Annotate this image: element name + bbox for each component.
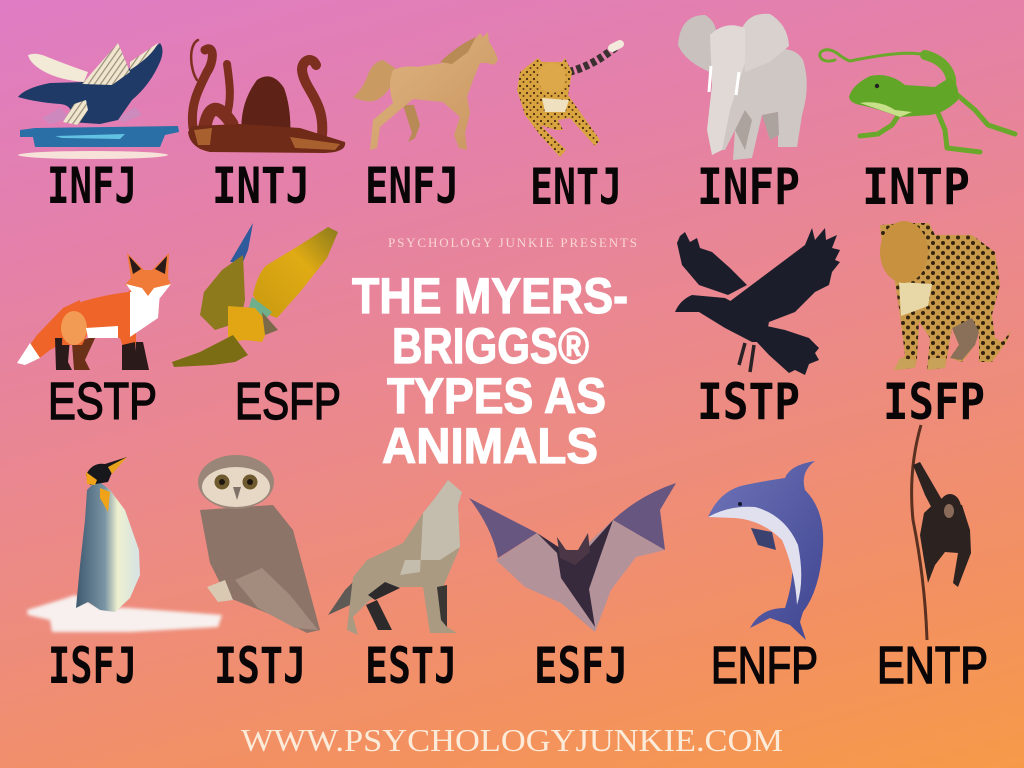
title: ANIMALS [382, 418, 598, 474]
animal: penguin on snow (ISFJ) [27, 457, 222, 632]
animal: leopard (ISFP) [880, 221, 1012, 370]
title [352, 268, 628, 474]
animal: octopus (INTJ) [188, 40, 345, 153]
animal: parrot (ESFP) [172, 223, 338, 367]
label: ISTJ [214, 637, 306, 695]
label: ENFP [711, 637, 818, 695]
animal: wolf (ESTJ) [328, 480, 462, 635]
animal: chimpanzee on vine (ENTP) [912, 425, 971, 640]
animal: crow (ISTP) [675, 228, 840, 375]
animal: lizard (INTP) [820, 50, 1015, 152]
footer website: WWW.PSYCHOLOGYJUNKIE.COM [241, 722, 783, 758]
small heading: PSYCHOLOGY JUNKIE PRESENTS [388, 235, 637, 250]
label: ISFP [883, 373, 985, 431]
label: ESFJ [534, 637, 628, 695]
animal: dolphin (ENFP) [708, 461, 823, 640]
label: ISFJ [48, 637, 137, 695]
label: INTJ [212, 157, 310, 215]
label: ESTP [48, 373, 157, 431]
label: ENFJ [365, 157, 459, 215]
animal: fox (ESTP) [17, 253, 171, 370]
label: INFJ [47, 157, 137, 215]
animal: horse (ENFJ) [353, 32, 498, 150]
animal: elephant (INFP) [678, 14, 807, 160]
label: INTP [862, 158, 970, 216]
animal: owl (ISTJ) [198, 455, 320, 633]
label: ENTJ [530, 158, 622, 216]
title: THE MYERS- [352, 268, 628, 324]
label: ENTP [877, 637, 988, 695]
title: BRIGGS® [392, 318, 589, 374]
animal: cheetah (ENTJ) [517, 44, 620, 157]
title: TYPES AS [387, 368, 606, 424]
label: ISTP [697, 373, 800, 431]
label: ESTJ [365, 637, 457, 695]
animal: whale (INFJ) [18, 43, 179, 159]
label: INFP [697, 158, 800, 216]
label: ESFP [235, 373, 341, 431]
animal: bat (ESFJ) [469, 483, 676, 632]
